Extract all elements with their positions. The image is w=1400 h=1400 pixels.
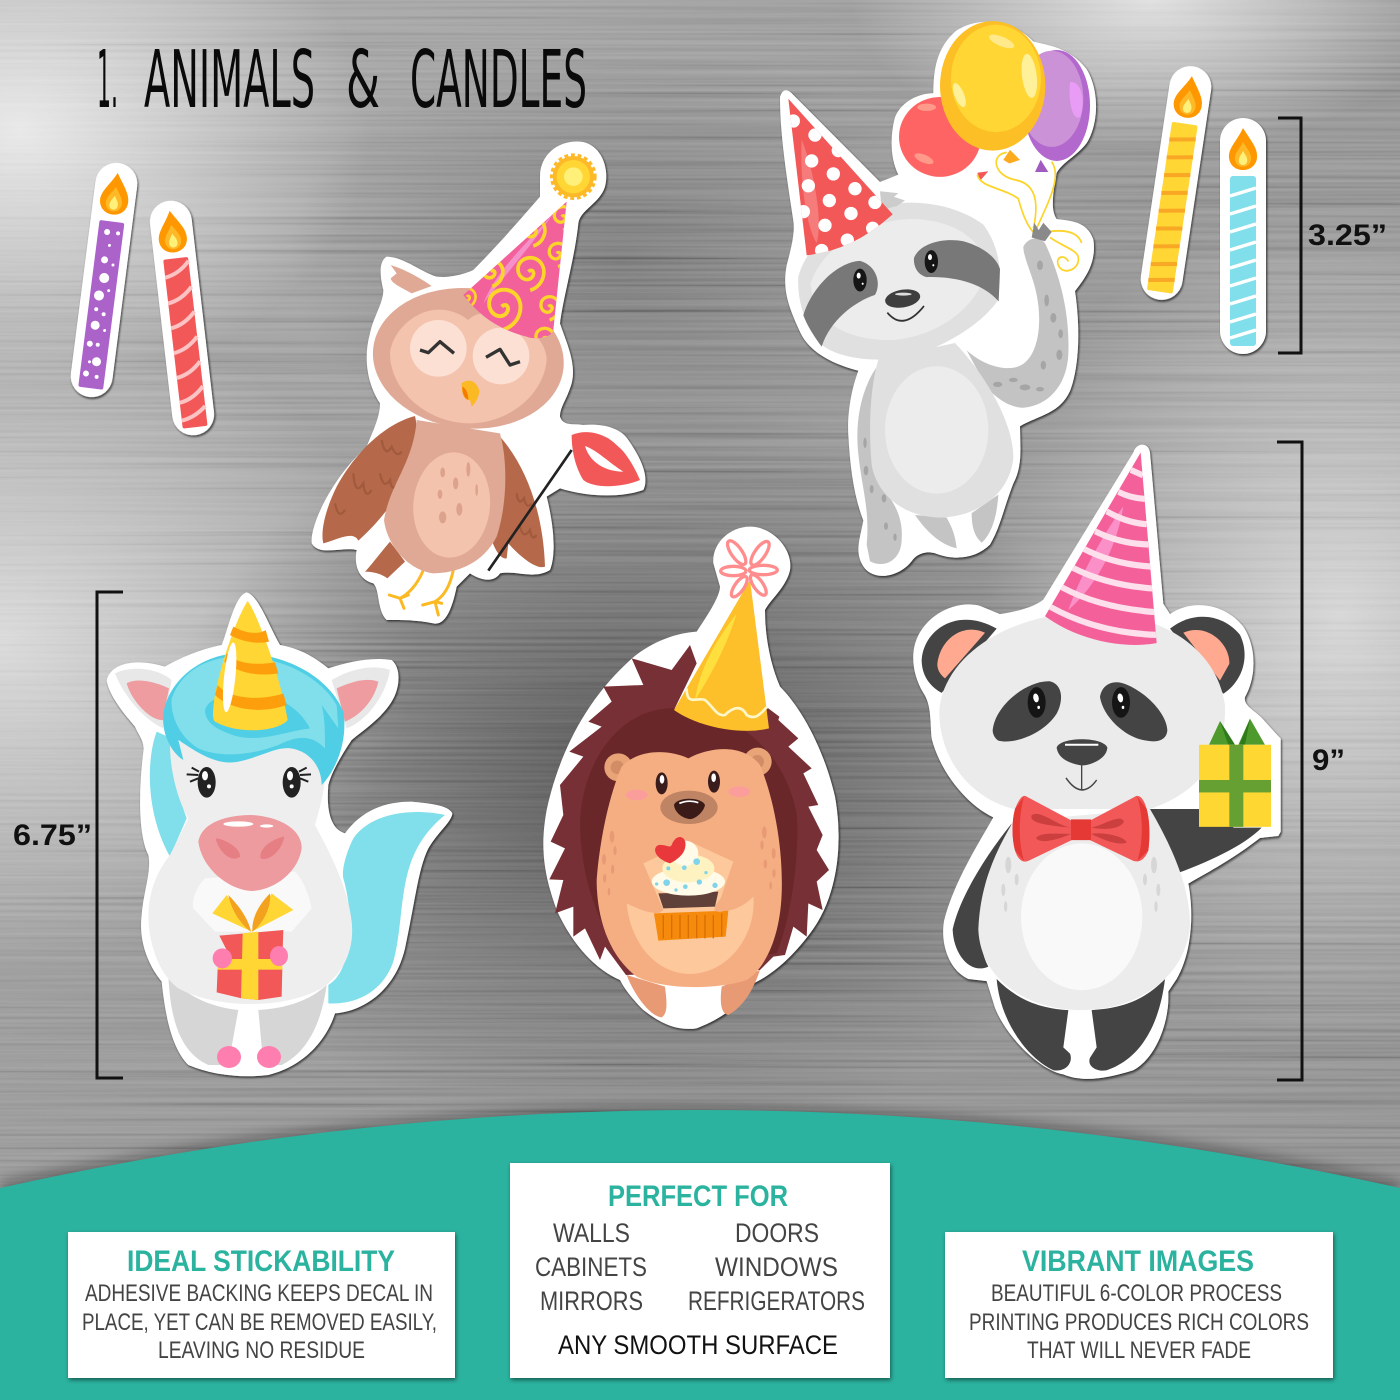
hedgehog body bbox=[597, 749, 782, 987]
title: & bbox=[346, 34, 380, 126]
unicorn legs bbox=[168, 975, 327, 1068]
text: CANDLES bbox=[410, 34, 587, 126]
panel: perfect for: CABINETS bbox=[535, 1252, 647, 1282]
unicorn gift bbox=[212, 893, 293, 1000]
sloth body bbox=[870, 343, 1013, 518]
unicorn party hat bbox=[213, 601, 288, 730]
balloons bbox=[899, 21, 1090, 271]
panel: perfect for: DOORS bbox=[735, 1218, 819, 1248]
panel: perfect for: ANY SMOOTH SURFACE bbox=[558, 1330, 838, 1360]
panda body bbox=[978, 809, 1190, 1010]
panel: ideal stickability: LEAVING NO RESIDUE bbox=[158, 1337, 365, 1364]
panda gift bbox=[1199, 719, 1271, 827]
owl feet bbox=[389, 570, 453, 615]
candle: red bbox=[148, 198, 216, 438]
candle: yellow bbox=[1138, 63, 1214, 303]
title: 1. bbox=[97, 34, 118, 126]
hedgehog face bbox=[626, 771, 750, 824]
teal footer band bbox=[0, 1107, 1400, 1400]
panel: perfect for: MIRRORS bbox=[540, 1286, 643, 1316]
dimension: 3.25 inch bracket: 3.25” bbox=[1308, 219, 1387, 252]
panda bow tie bbox=[1012, 796, 1149, 862]
candle: purple bbox=[68, 160, 140, 400]
sloth head bbox=[798, 191, 1000, 360]
owl party hat bbox=[461, 156, 594, 352]
hedgehog feet bbox=[627, 970, 760, 1017]
panda party hat bbox=[1045, 452, 1157, 645]
hedgehog ears bbox=[604, 748, 772, 781]
panel: vibrant images: PRINTING PRODUCES RICH COLORS bbox=[969, 1309, 1309, 1336]
owl head bbox=[366, 265, 571, 438]
dimension: 9 inch bracket: 9” bbox=[1312, 744, 1345, 777]
sloth left arm bbox=[857, 367, 902, 564]
panel: vibrant images: VIBRANT IMAGES bbox=[1022, 1245, 1254, 1278]
sticker: unicorn bbox=[107, 592, 452, 1076]
panel: perfect for: WALLS bbox=[553, 1218, 630, 1248]
unicorn ears bbox=[115, 667, 390, 728]
sloth right arm bbox=[967, 223, 1069, 408]
unicorn mane bbox=[163, 653, 344, 785]
panel: ideal stickability: ADHESIVE BACKING KEEPS DECAL IN bbox=[85, 1280, 433, 1307]
panel: vibrant images: BEAUTIFUL 6-COLOR PROCESS bbox=[991, 1280, 1282, 1307]
dimension: 3.25 inch bracket bbox=[1278, 118, 1387, 353]
owl body bbox=[384, 420, 505, 573]
sloth party hat bbox=[787, 99, 893, 257]
lips on a stick bbox=[488, 432, 640, 571]
sticker: panda bbox=[913, 445, 1281, 1079]
candle: blue bbox=[1220, 118, 1266, 354]
panel: ideal stickability: PLACE, YET CAN BE REMOVED EASILY, bbox=[82, 1309, 437, 1336]
panda limbs bbox=[953, 809, 1262, 1071]
unicorn back mane bbox=[150, 732, 187, 857]
dimension: 9 inch bracket bbox=[1277, 442, 1345, 1080]
panel: perfect for: WINDOWS bbox=[715, 1252, 838, 1282]
panel: perfect for bbox=[510, 1163, 890, 1378]
sticker: hedgehog bbox=[543, 527, 839, 1029]
dimension: 6.75 inch bracket bbox=[13, 592, 123, 1078]
title: ANIMALS bbox=[144, 34, 315, 126]
unicorn muzzle bbox=[198, 815, 302, 891]
panel: perfect for: PERFECT FOR bbox=[608, 1180, 788, 1213]
panel: vibrant images bbox=[945, 1232, 1333, 1378]
panel: ideal stickability bbox=[68, 1232, 455, 1378]
sloth legs bbox=[915, 495, 998, 548]
panel: perfect for: REFRIGERATORS bbox=[688, 1286, 865, 1316]
panda head bbox=[939, 612, 1225, 809]
panda ears bbox=[922, 617, 1245, 694]
panel: vibrant images: THAT WILL NEVER FADE bbox=[1027, 1337, 1251, 1364]
panel: ideal stickability: IDEAL STICKABILITY bbox=[127, 1245, 395, 1278]
sticker: sloth with balloons bbox=[780, 21, 1096, 576]
unicorn eyes bbox=[187, 767, 311, 798]
owl wings bbox=[322, 416, 545, 578]
hedgehog party hat bbox=[674, 538, 777, 731]
dimension: 6.75 inch bracket: 6.75” bbox=[13, 819, 92, 852]
unicorn body and head bbox=[148, 742, 352, 1004]
hedgehog spines bbox=[549, 645, 829, 975]
sticker: owl bbox=[312, 142, 645, 624]
hedgehog cupcake bbox=[643, 837, 743, 941]
unicorn tail bbox=[328, 812, 445, 1004]
